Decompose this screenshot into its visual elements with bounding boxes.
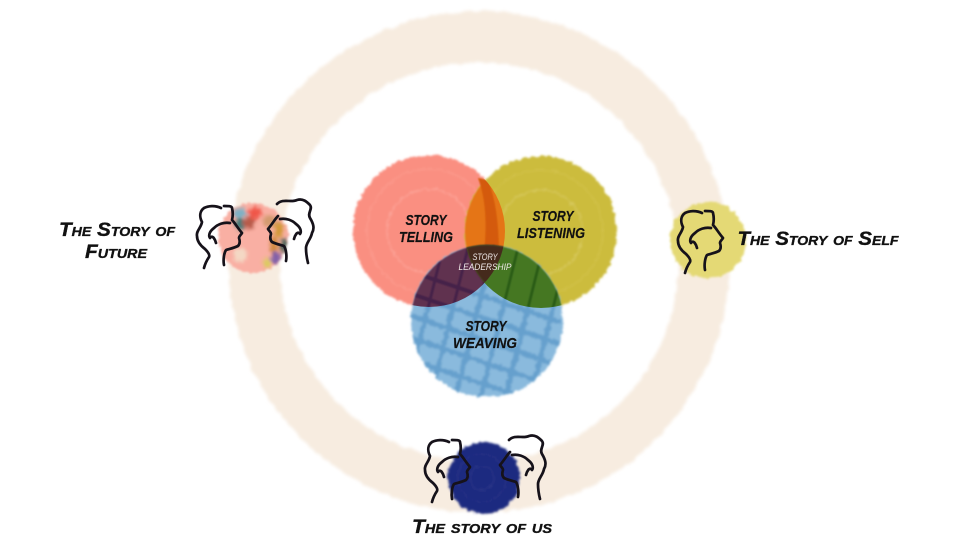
label: story weaving: WEAVING	[453, 335, 517, 352]
head outline: right profile	[268, 199, 313, 263]
label: story leadership	[458, 252, 512, 272]
overlap: listening and weaving	[466, 244, 562, 308]
painted circle: us	[448, 442, 520, 514]
label: story telling	[399, 212, 453, 246]
label: story telling: TELLING	[399, 229, 453, 246]
venn diagram: story leadership	[353, 155, 617, 410]
circle: story weaving with woven grid	[408, 246, 565, 399]
label: story weaving: STORY	[466, 318, 508, 335]
node: the story of us	[412, 435, 552, 538]
head outline: self profile	[678, 211, 723, 273]
label: story weaving	[453, 318, 517, 352]
background ring	[254, 37, 704, 487]
overlap: story leadership centre	[466, 244, 504, 283]
painted circle: self	[670, 202, 746, 278]
circle: story listening	[465, 156, 617, 308]
label: the story of self: The Story of Self	[738, 229, 900, 250]
label: story listening	[517, 208, 585, 242]
head outline: left profile	[197, 206, 242, 268]
label: story listening: STORY	[532, 208, 575, 225]
label: the story of future: The Story of	[59, 220, 176, 241]
label: story telling: STORY	[406, 212, 448, 229]
node: the story of future	[59, 199, 313, 273]
label: story leadership: STORY	[472, 252, 498, 262]
head outline: left profile	[425, 440, 470, 502]
label: story leadership: LEADERSHIP	[458, 262, 512, 272]
label: the story of us: The story of us	[412, 517, 552, 538]
head outline: right profile	[500, 435, 545, 499]
painted circle: future	[218, 203, 288, 273]
label: the story of future: Future	[85, 242, 147, 263]
overlap: telling and weaving	[412, 244, 504, 307]
circle: story telling	[353, 155, 505, 307]
node: the story of self	[670, 202, 900, 278]
label: story listening: LISTENING	[517, 225, 585, 242]
label: the story of future	[59, 220, 176, 263]
overlap: telling and listening	[464, 177, 505, 248]
